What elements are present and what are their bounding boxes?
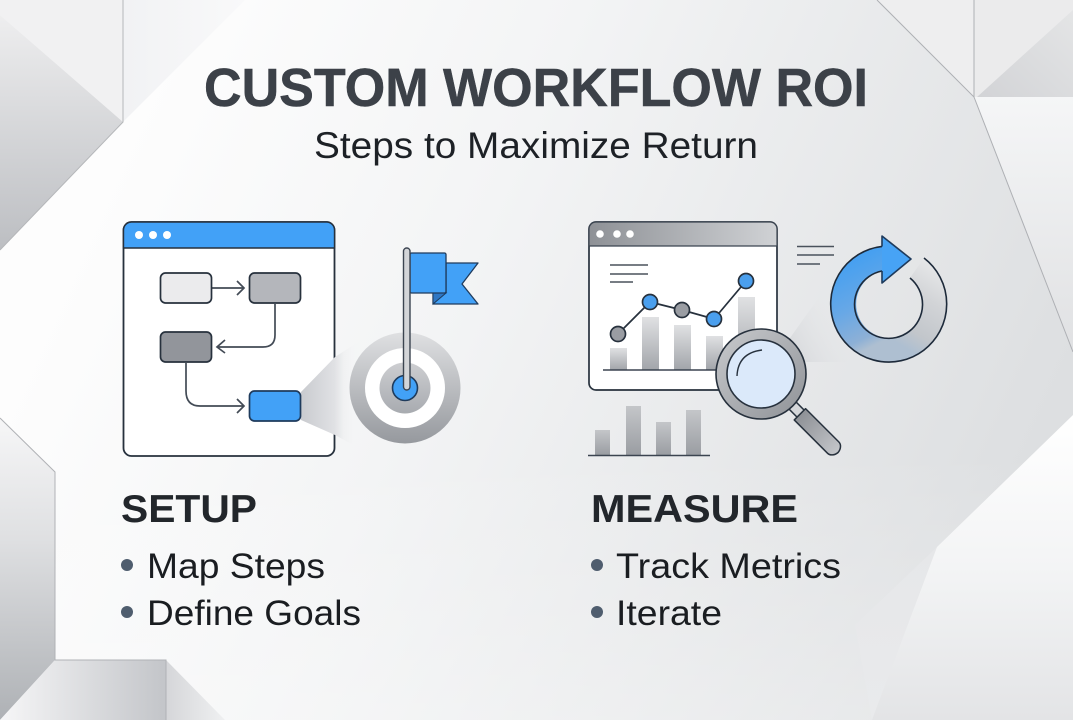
title: CUSTOM WORKFLOW ROI: [204, 58, 868, 118]
subtitle: Steps to Maximize Return: [314, 125, 758, 166]
heading: setup: SETUP: [121, 488, 257, 531]
icon: cycle arrow: [831, 236, 947, 362]
panel: setup illustration: [124, 222, 478, 456]
list: setup items: Define Goals: [147, 594, 361, 633]
icon: flag: [404, 248, 478, 390]
list: measure items: Track Metrics: [616, 547, 841, 586]
flow connectors: [186, 281, 275, 413]
panel: measure illustration: [588, 222, 947, 458]
flow box: start: [160, 273, 212, 303]
line chart: [610, 274, 754, 342]
text lines near cycle: [797, 246, 834, 264]
spotlight beam to target: [301, 333, 372, 455]
heading: measure: MEASURE: [591, 488, 798, 531]
flow box: process: [250, 273, 300, 303]
list: measure items: [591, 547, 841, 633]
flow box: decision: [160, 332, 212, 362]
list: measure items: Iterate: [616, 594, 722, 633]
window text lines: [610, 265, 648, 282]
icon: target: [350, 332, 460, 444]
dashboard window: [589, 222, 777, 390]
spotlight beam to cycle: [785, 293, 850, 362]
lower bar chart: [588, 406, 710, 456]
list: setup items: [121, 547, 361, 633]
flow box: goal: [250, 391, 300, 421]
list: setup items: Map Steps: [147, 547, 325, 586]
bar chart: [603, 297, 755, 370]
icon: magnifier: [716, 329, 844, 458]
workflow window: [124, 222, 334, 456]
